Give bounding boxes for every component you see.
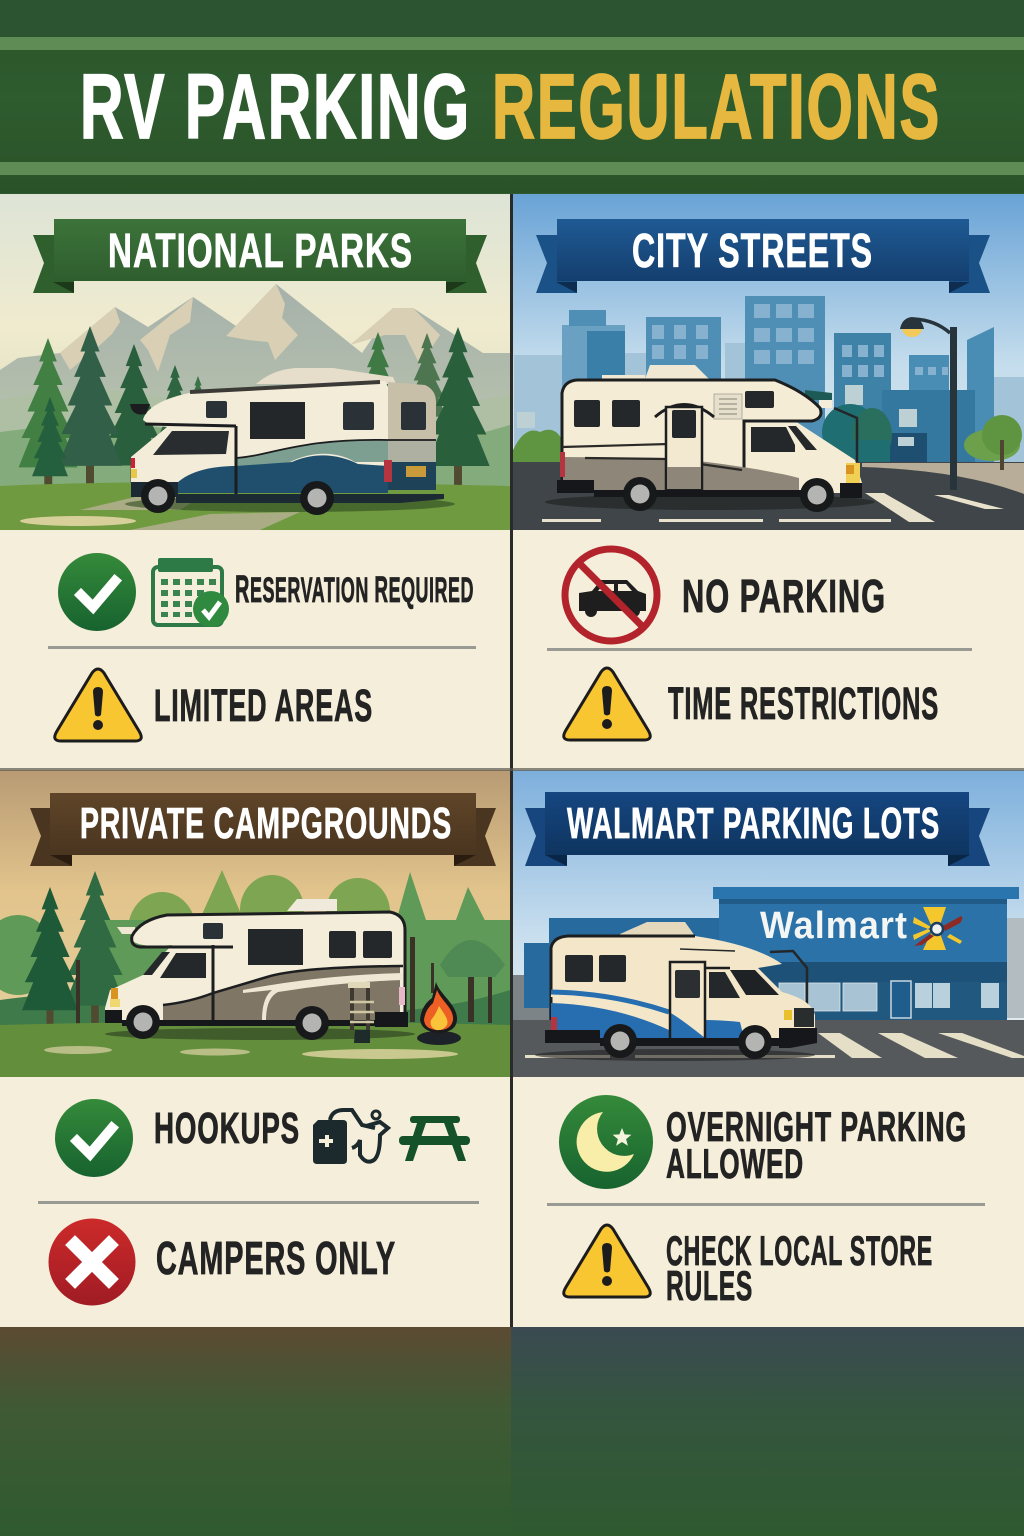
panel: national parks (0, 194, 510, 770)
icon: warning (564, 668, 650, 740)
title: RV PARKING (80, 56, 471, 158)
panel: walmart parking lots (513, 770, 1024, 1327)
info card: private campgrounds (0, 1077, 510, 1327)
info card: national parks (0, 530, 510, 770)
text: overnight parking allowed: ALLOWED (666, 1140, 804, 1187)
heading: CITY STREETS (632, 225, 873, 278)
icon: no parking (565, 549, 657, 641)
row divider (0, 768, 1024, 771)
store sign: Walmart (760, 905, 908, 947)
heading: PRIVATE CAMPGROUNDS (80, 799, 452, 848)
heading: NATIONAL PARKS (108, 225, 413, 278)
RV: national parks (125, 368, 455, 515)
text: limited areas: LIMITED AREAS (154, 680, 373, 731)
panel: city streets (513, 194, 1024, 770)
store building (713, 887, 1019, 1020)
banner: city streets (536, 219, 990, 293)
icon: picnic table (399, 1116, 470, 1161)
private campgrounds scene (0, 770, 510, 1077)
walmart scene (513, 770, 1024, 1077)
banner: private campgrounds (30, 793, 496, 866)
icon: hookup tank and plug (313, 1110, 388, 1164)
text: check local store rules: RULES (666, 1262, 753, 1309)
icon: warning (55, 669, 141, 741)
text: no parking: NO PARKING (682, 570, 886, 622)
info card: city streets (513, 530, 1024, 770)
icon: overnight moon (559, 1095, 653, 1189)
text: hookups: HOOKUPS (154, 1104, 300, 1153)
RV: city streets (545, 365, 875, 512)
city streets scene (513, 194, 1024, 530)
icon: check (55, 1099, 133, 1177)
text: check local store rules (666, 1227, 933, 1309)
bottom band (0, 1327, 1024, 1536)
bush (513, 430, 562, 482)
campfire (417, 982, 461, 1045)
store spark logo (913, 907, 962, 950)
street lamp (900, 317, 957, 490)
national parks scene (0, 194, 510, 530)
icon: warning (564, 1225, 650, 1297)
icon: calendar (153, 558, 229, 627)
banner: national parks (33, 219, 487, 293)
text: reservation required: RESERVATION REQUIRED (235, 568, 474, 611)
info card: walmart (513, 1077, 1024, 1327)
icon: cross (48, 1218, 136, 1306)
tree (964, 415, 1022, 470)
text: campers only: CAMPERS ONLY (156, 1232, 396, 1284)
icon: check (58, 553, 136, 631)
text: overnight parking allowed (666, 1103, 967, 1187)
RV: private campgrounds (105, 899, 415, 1043)
banner: walmart (525, 792, 990, 866)
header band (0, 0, 1024, 193)
panel: private campgrounds (0, 770, 510, 1327)
RV: walmart (535, 922, 817, 1061)
center divider (510, 194, 513, 1327)
ladder (348, 982, 374, 1043)
